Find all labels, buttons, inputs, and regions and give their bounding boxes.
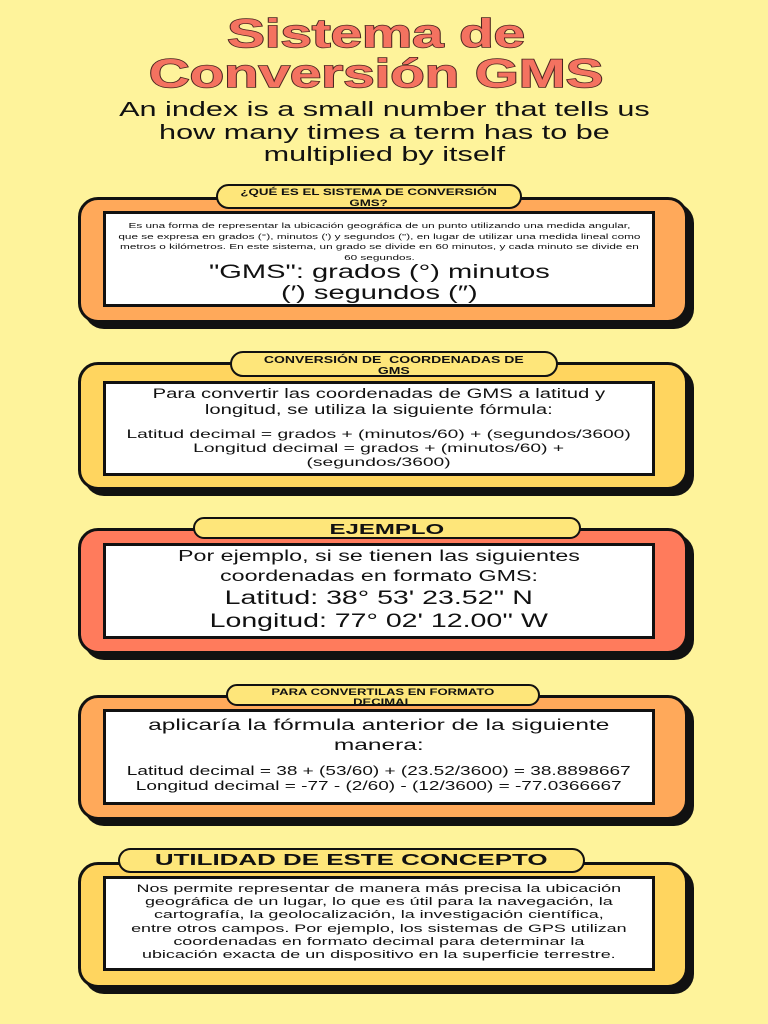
subtitle xyxy=(119,99,649,166)
apply text: manera: xyxy=(334,737,424,754)
title: Conversión GMS xyxy=(149,52,603,96)
utility text: coordenadas en formato decimal para determinar la xyxy=(174,936,584,948)
inner text box xyxy=(103,381,655,476)
panel: ejemplo xyxy=(78,528,688,654)
pill: ejemplo xyxy=(193,517,581,539)
pill: ejemplo: EJEMPLO xyxy=(330,521,444,538)
subtitle: how many times a term has to be xyxy=(159,122,609,144)
utility text xyxy=(131,883,627,961)
pill: que es xyxy=(216,184,522,209)
definition text: que se expresa en grados (°), minutos (') y segundos ("), en lugar de utilizar una medida lineal como xyxy=(118,232,640,240)
coordinates: Latitud: 38° 53' 23.52'' N xyxy=(225,588,533,609)
inner text box xyxy=(103,709,655,805)
panel: que es xyxy=(78,197,688,323)
subtitle: multiplied by itself xyxy=(263,144,505,166)
panel: utilidad xyxy=(78,862,688,988)
apply text xyxy=(148,717,610,754)
panel: conversion xyxy=(78,362,688,490)
pill: conversion: GMS xyxy=(378,366,410,377)
pill: conversion: CONVERSIÓN DE COORDENADAS DE xyxy=(264,355,524,366)
pill: formato decimal xyxy=(226,684,540,706)
result formulas: Latitud decimal = 38 + (53/60) + (23.52/3600) = 38.8898667 xyxy=(127,764,631,778)
panel: formato decimal xyxy=(78,695,688,820)
pill: utilidad xyxy=(118,848,585,873)
example intro: coordenadas en formato GMS: xyxy=(220,568,538,585)
inner text box xyxy=(103,543,655,639)
example intro xyxy=(178,548,580,585)
utility text: ubicación exacta de un dispositivo en la superficie terrestre. xyxy=(142,949,616,961)
pill: que es: ¿QUÉ ES EL SISTEMA DE CONVERSIÓN xyxy=(241,187,497,198)
title xyxy=(149,12,603,96)
example intro: Por ejemplo, si se tienen las siguientes xyxy=(178,548,580,565)
definition text: Es una forma de representar la ubicación geográfica de un punto utilizando una medida angular, xyxy=(128,221,630,230)
pill: utilidad: UTILIDAD DE ESTE CONCEPTO xyxy=(155,852,548,869)
definition text: metros o kilómetros. En este sistema, un grado se divide en 60 minutos, y cada minuto se divide en xyxy=(120,242,638,251)
intro text xyxy=(153,386,605,417)
intro text: Para convertir las coordenadas de GMS a latitud y xyxy=(153,386,605,401)
pill: formato decimal: DECIMAL xyxy=(353,697,413,707)
formula text xyxy=(127,427,631,469)
formula text: Longitud decimal = grados + (minutos/60) + xyxy=(194,441,564,455)
pill: que es: GMS? xyxy=(350,198,388,209)
apply text: aplicaría la fórmula anterior de la siguiente xyxy=(148,717,610,734)
coordinates: Longitud: 77° 02' 12.00'' W xyxy=(210,611,548,632)
inner text box xyxy=(103,211,655,307)
intro text: longitud, se utiliza la siguiente fórmula: xyxy=(205,402,553,417)
formula text: Latitud decimal = grados + (minutos/60) + (segundos/3600) xyxy=(127,427,631,441)
utility text: cartografía, la geolocalización, la investigación científica, xyxy=(154,909,604,921)
definition text xyxy=(118,221,640,262)
result formulas: Longitud decimal = -77 - (2/60) - (12/3600) = -77.0366667 xyxy=(136,778,622,792)
title: Sistema de xyxy=(227,12,525,56)
pill: formato decimal: PARA CONVERTILAS EN FORMATO xyxy=(272,687,494,697)
utility text: geográfica de un lugar, lo que es útil para la navegación, la xyxy=(145,896,613,908)
inner text box xyxy=(103,876,655,971)
formula text: (segundos/3600) xyxy=(307,455,451,469)
result formulas xyxy=(127,764,631,792)
pill: conversion xyxy=(230,351,558,377)
utility text: entre otros campos. Por ejemplo, los sistemas de GPS utilizan xyxy=(131,923,627,935)
GMS text: (′) segundos (″) xyxy=(281,283,477,304)
utility text: Nos permite representar de manera más precisa la ubicación xyxy=(137,883,621,895)
definition text: 60 segundos. xyxy=(344,252,414,262)
subtitle: An index is a small number that tells us xyxy=(119,99,649,121)
GMS text xyxy=(209,262,549,304)
coordinates xyxy=(210,588,548,632)
GMS text: "GMS": grados (°) minutos xyxy=(209,262,549,283)
